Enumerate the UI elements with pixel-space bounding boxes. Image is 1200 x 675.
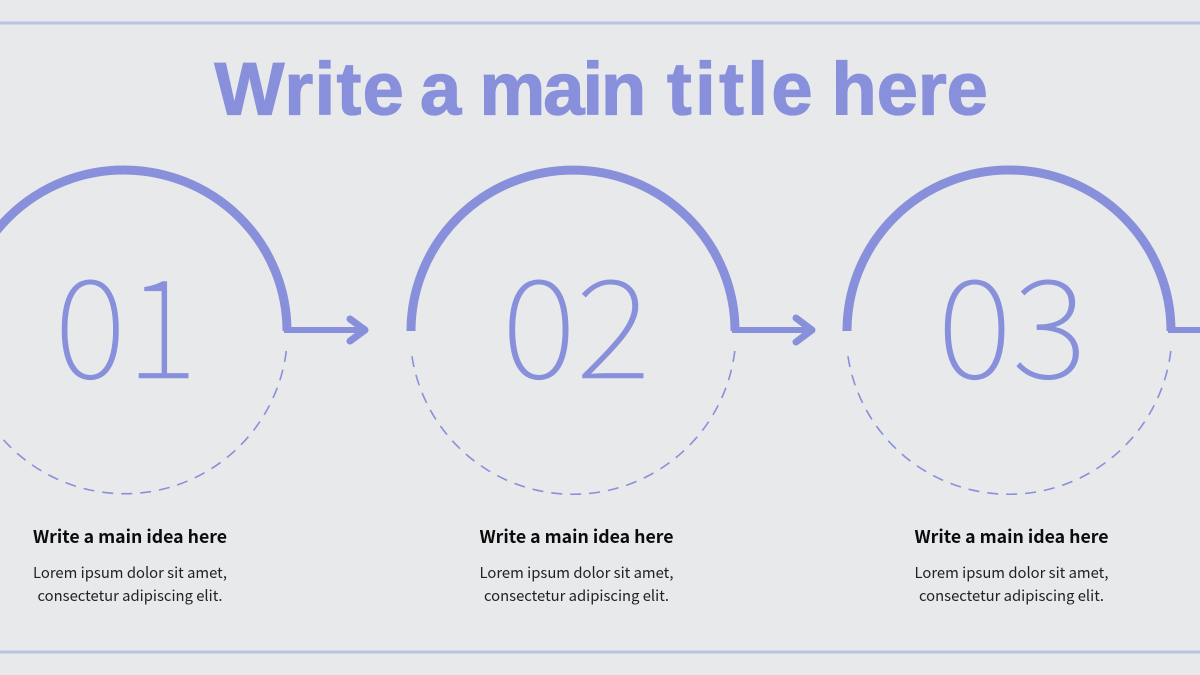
step 1 number: 01 <box>54 220 198 418</box>
step 1 body text line 2: consectetur adipiscing elit. <box>37 585 223 606</box>
title: a <box>420 48 462 130</box>
title: title <box>667 48 816 130</box>
step 3 heading: Write a main idea here <box>914 523 1109 549</box>
step 2 body text line 2: consectetur adipiscing elit. <box>484 585 669 606</box>
step 2 number: 02 <box>502 220 650 418</box>
step 2 body text: Lorem ipsum dolor sit amet, <box>480 562 673 583</box>
step 2 solid arc and arrow <box>411 170 812 342</box>
step 3 body text line 2: consectetur adipiscing elit. <box>919 585 1104 606</box>
step 3 <box>847 170 1200 583</box>
step 3 dashed arc <box>847 351 1171 494</box>
title: main <box>480 48 644 130</box>
step 1 body text: Lorem ipsum dolor sit amet, <box>33 562 227 583</box>
step 3 number: 03 <box>937 220 1087 418</box>
step 1 dashed arc <box>1 351 286 494</box>
step 1 heading: Write a main idea here <box>33 523 227 549</box>
step 2 dashed arc <box>411 351 735 494</box>
step 2 heading: Write a main idea here <box>479 523 674 549</box>
step 3 body text: Lorem ipsum dolor sit amet, <box>915 562 1108 583</box>
step 3 solid arc and connector <box>847 170 1200 331</box>
title: here <box>832 48 988 130</box>
step 2 <box>411 170 812 583</box>
step 1 <box>0 170 365 583</box>
title: Write <box>214 48 405 130</box>
step 1 solid arc and arrow <box>0 170 365 341</box>
